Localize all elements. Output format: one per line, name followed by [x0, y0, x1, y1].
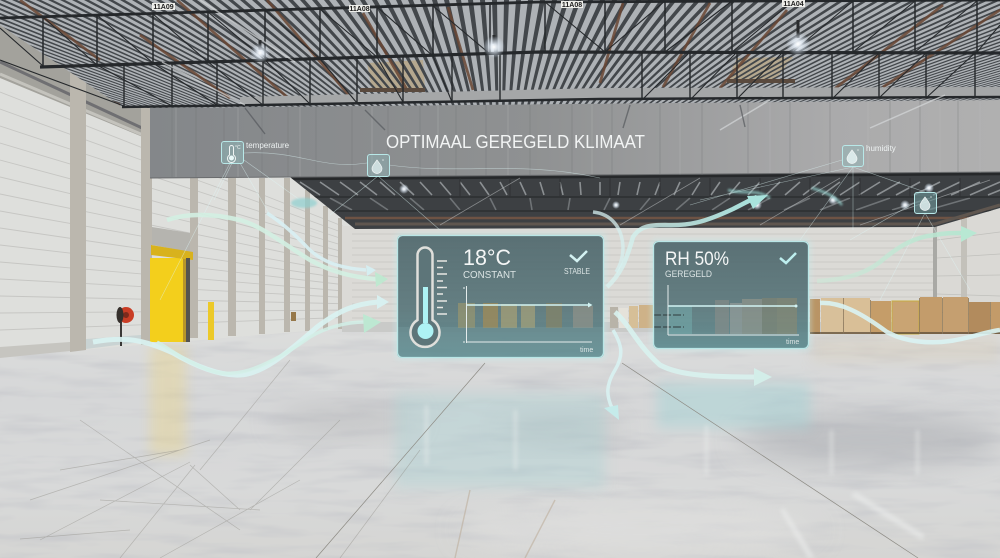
sensor icon: temperature: °C — [235, 145, 241, 151]
sensor icon: droplet left: ° — [382, 159, 384, 165]
wall pillars — [70, 70, 342, 352]
humidity status label: GEREGELD — [665, 269, 712, 280]
corrugated upper roof — [0, 0, 1000, 108]
floor reflections: light streaks — [425, 405, 925, 558]
arrow: air flowing in upper left, pale green — [167, 215, 388, 287]
airflow swirl accents — [291, 188, 842, 208]
arrow: air leaving to far right, green — [817, 226, 977, 281]
temperature status label: CONSTANT — [463, 269, 517, 281]
high bay lights — [250, 20, 810, 63]
light band above banner — [240, 87, 1000, 104]
banner title: OPTIMAAL GEREGELD KLIMAAT — [386, 132, 645, 152]
yellow dock door — [150, 227, 193, 342]
line chart: constant temperature over time: time — [580, 347, 593, 354]
dock base strip — [0, 342, 70, 358]
sensor label: temperature: temperature — [246, 141, 290, 150]
sensor icon: temperature — [222, 142, 244, 164]
back wall — [342, 226, 942, 332]
line chart: constant temperature over time — [463, 286, 593, 354]
panel: temperature card — [394, 232, 607, 361]
line chart: regulated humidity over time: time — [786, 339, 799, 346]
icon: check mark — [780, 253, 796, 263]
floor reflection: climate cards — [395, 336, 1000, 488]
low ceiling lights — [399, 183, 934, 210]
arrow: air leaving to upper right — [607, 195, 768, 287]
humidity value: RH 50% — [665, 248, 729, 270]
sensor icon: droplet left — [368, 154, 390, 176]
arrow: air flowing in lower left, pale blue — [93, 295, 389, 375]
arrow: curved air rising between cards — [593, 212, 623, 272]
bay number labels: 11A08 — [349, 6, 370, 13]
sensor label: humidity: humidity — [866, 144, 896, 153]
sensor icon: droplet right — [914, 192, 936, 214]
warehouse floor — [0, 325, 1000, 558]
sensor icon: droplet right: ° — [930, 196, 932, 202]
temperature value: 18°C — [463, 245, 511, 270]
stacked cargo crates — [610, 297, 1000, 334]
crates seen through temperature card — [458, 303, 593, 328]
sensor icon: humidity — [842, 146, 864, 166]
rust brown rafters — [0, 0, 1000, 105]
steel roof trusses — [0, 0, 1000, 134]
left side wall — [0, 25, 355, 358]
floor seams and scratches — [20, 360, 918, 558]
line chart: regulated humidity over time — [668, 285, 799, 346]
icon: thermometer — [410, 248, 447, 347]
hanging climate curtain banner — [150, 99, 1000, 178]
panel: humidity card — [650, 238, 812, 352]
bay number labels: 11A04 — [783, 1, 804, 8]
bay number labels: 11A09 — [153, 4, 174, 11]
skylight panels — [367, 57, 793, 90]
fire hose reel — [116, 307, 134, 346]
small yellow door post — [208, 302, 214, 340]
arrow: air flowing downward to the floor — [604, 330, 621, 420]
right wall — [933, 208, 1000, 332]
arrow: air flowing in lower left, pale green — [157, 314, 381, 373]
arrow: air leaving to the right across the floor — [615, 312, 772, 386]
sensor icon: humidity: ° — [857, 149, 859, 155]
bay number labels — [152, 0, 805, 13]
arrow: air flowing in upper left, pale blue — [267, 213, 376, 276]
stable label: STABLE — [564, 267, 590, 276]
sensor network lines — [160, 153, 970, 300]
icon: stable check mark — [570, 251, 587, 261]
arrow: air leaving to lower right edge — [820, 303, 1000, 342]
crates seen through humidity card — [653, 298, 797, 334]
floor reflection: yellow door — [150, 345, 186, 455]
lower ceiling behind banner — [290, 172, 1000, 229]
bay number labels: 11A08 — [562, 2, 582, 9]
